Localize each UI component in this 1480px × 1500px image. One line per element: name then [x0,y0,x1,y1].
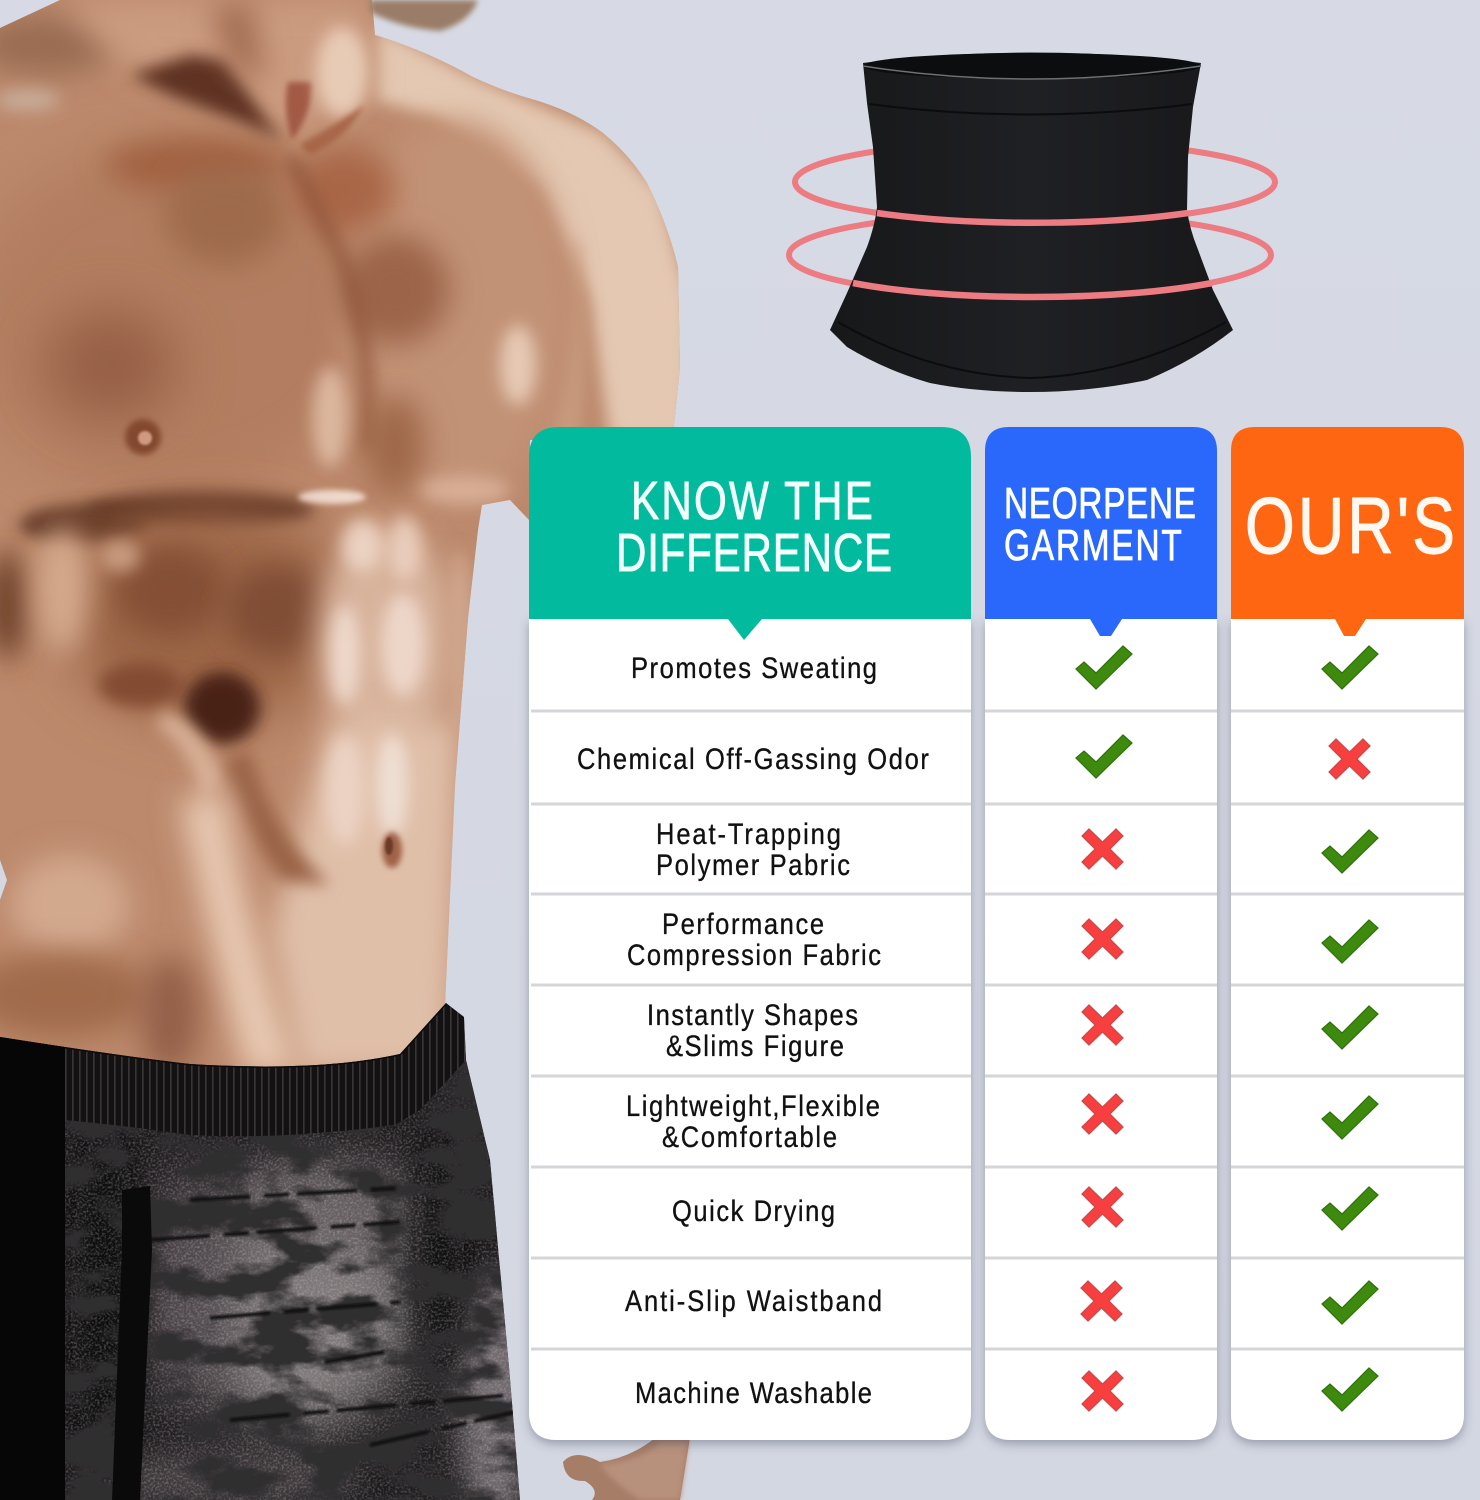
feature labels: Machine Washable [635,1376,872,1409]
heading: neorpene garment: NEORPENE [1004,480,1196,528]
feature labels: Heat-Trapping [656,817,841,850]
feature labels: Quick Drying [672,1194,835,1227]
garment body [830,52,1233,392]
feature labels: Chemical Off-Gassing Odor [577,742,929,775]
heading: our's: OUR'S [1245,481,1455,571]
feature labels: &Slims Figure [666,1029,844,1062]
feature labels: Instantly Shapes [647,998,858,1031]
feature labels: &Comfortable [662,1120,837,1153]
waist trimmer garment with measuring rings [789,52,1275,392]
heading: neorpene garment [1004,480,1196,570]
panel: feature column [529,427,971,1440]
heading: know the difference [616,471,892,583]
nipple [125,419,161,455]
panel: neoprene garment column [985,427,1217,1440]
feature labels: Compression Fabric [627,938,881,971]
feature labels: Performance [662,907,824,940]
beard and chin [370,0,478,31]
photo: hand below table [563,1438,690,1500]
rings in front of garment [853,213,1212,297]
feature labels: Promotes Sweating [631,651,877,684]
rings behind garment [789,141,1275,297]
heading: know the difference: DIFFERENCE [616,523,892,583]
feature labels: Lightweight,Flexible [626,1089,880,1122]
heading: know the difference: KNOW THE [631,471,873,531]
photo: muscular torso [0,0,700,1080]
comparison table [529,427,1464,1440]
navel [382,832,402,868]
zipper [112,1186,152,1500]
feature labels: Anti-Slip Waistband [625,1284,882,1317]
black side panel [0,1030,65,1500]
our's column marks [1322,646,1378,1411]
heading: neorpene garment: GARMENT [1004,522,1182,570]
photo: patterned shorts [0,1000,531,1500]
neoprene column marks [1076,646,1132,1411]
panel: our's column [1231,427,1464,1440]
feature labels: Polymer Pabric [656,848,850,881]
feature labels [577,651,929,1409]
